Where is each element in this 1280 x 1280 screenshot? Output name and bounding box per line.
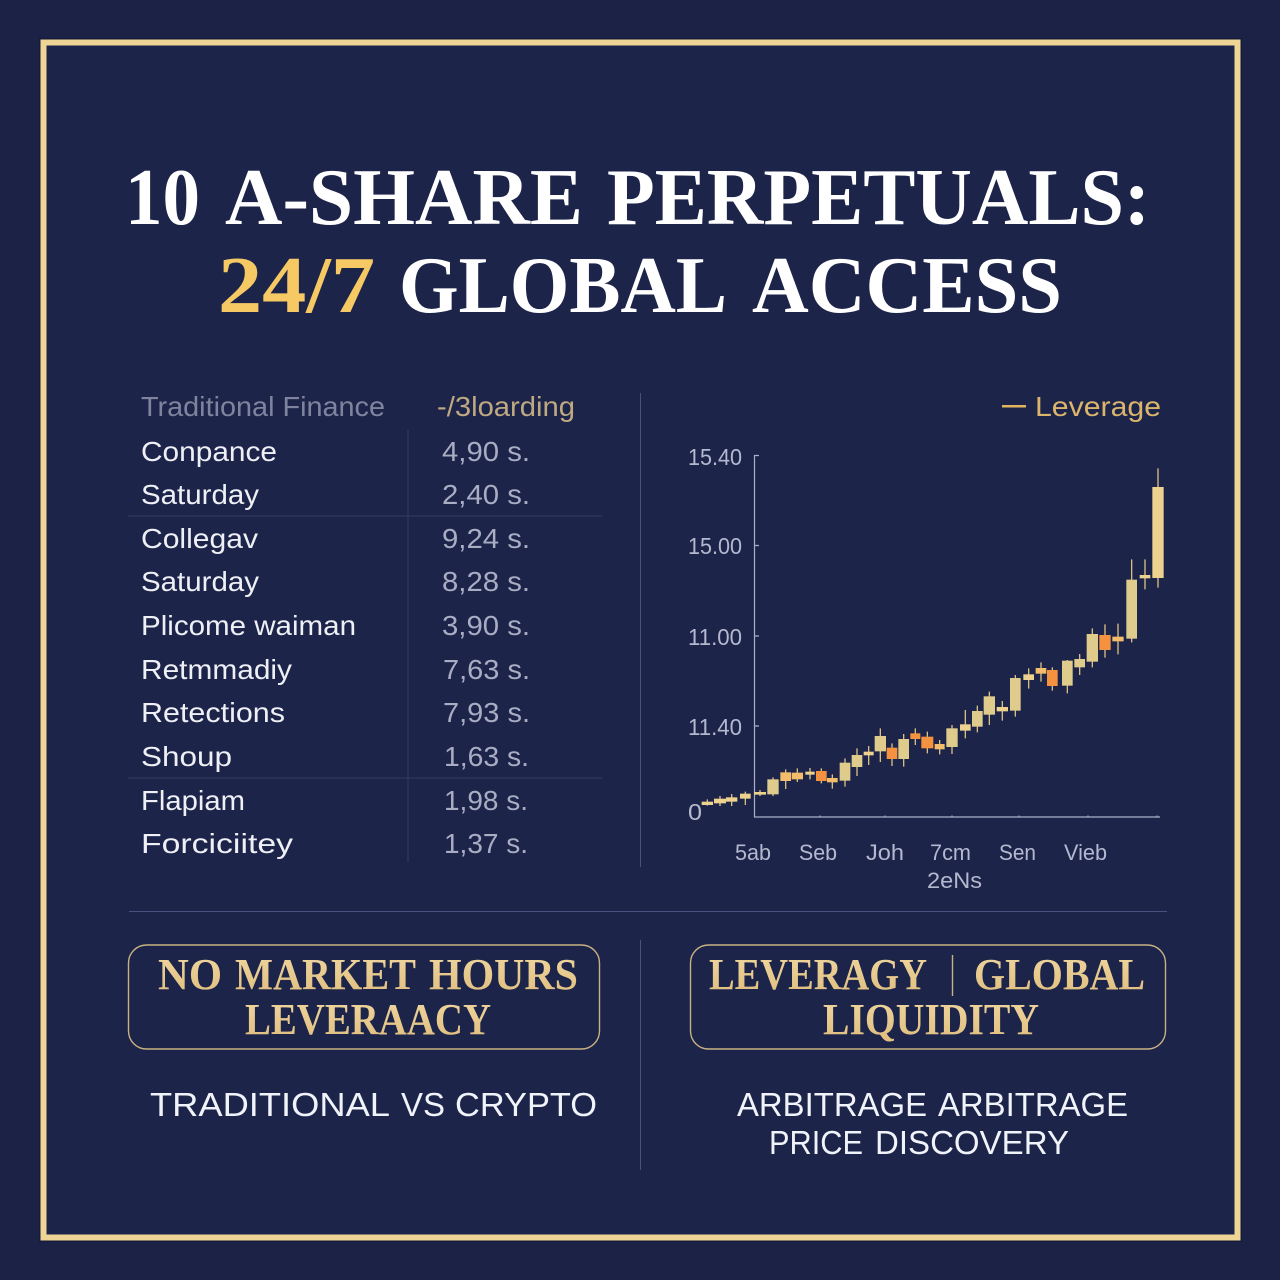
y axis labels: 11.40 (688, 714, 742, 740)
panel: candlestick chart (688, 391, 1164, 893)
table rows: 7,93 s. (443, 697, 530, 728)
caption: arbitrage and price discovery: ARBITRAGE (737, 1086, 927, 1123)
table rows: 1,37 s. (444, 828, 528, 859)
y axis labels: 15.40 (688, 444, 742, 470)
table rows: Retmmadiy (141, 654, 292, 685)
x axis labels: Seb (799, 840, 837, 865)
callout: leverage and global liquidity: GLOBAL (974, 950, 1145, 999)
candles: late segment (921, 468, 1164, 754)
callout: leverage and global liquidity: LEVERAGY (709, 950, 927, 999)
callout: no market hours: HOURS (429, 950, 578, 999)
table rows: 3,90 s. (442, 610, 530, 641)
callout: no market hours (128, 945, 600, 1049)
title (125, 154, 1150, 330)
x axis labels: 2eNs (927, 868, 982, 893)
title: 24/7 (218, 242, 375, 330)
table rows: Shoup (141, 741, 232, 772)
x axis labels (735, 840, 1107, 893)
x axis labels: Vieb (1064, 840, 1107, 865)
y axis labels: 11.00 (688, 624, 742, 650)
title: GLOBAL (399, 242, 727, 330)
table header (141, 391, 575, 422)
title: PERPETUALS: (607, 154, 1150, 242)
legend: Leverage (1035, 391, 1161, 422)
y axis labels: 15.00 (688, 533, 742, 559)
table rows: 1,63 s. (444, 741, 529, 772)
table rows: 1,98 s. (444, 785, 528, 816)
table rows: 7,63 s. (443, 654, 530, 685)
title: ACCESS (752, 242, 1062, 330)
table rows: Conpance (141, 436, 277, 467)
caption: traditional vs crypto: CRYPTO (455, 1086, 597, 1123)
panel: comparison table (128, 391, 602, 862)
callout: leverage and global liquidity: LIQUIDITY (823, 995, 1039, 1044)
table rows: Saturday (141, 566, 259, 597)
table rows: 9,24 s. (442, 523, 530, 554)
x axis labels: 7cm (930, 840, 971, 865)
table rows: Saturday (141, 479, 259, 510)
callout: no market hours: NO (158, 950, 222, 999)
table rows: 4,90 s. (442, 436, 530, 467)
table rows: Plicome waiman (141, 610, 356, 641)
y axis labels (688, 444, 742, 825)
caption: arbitrage and price discovery: ARBITRAGE (938, 1086, 1128, 1123)
callout: no market hours: MARKET (235, 950, 416, 999)
callout: leverage and global liquidity (690, 945, 1166, 1049)
table rows: Flapiam (141, 785, 245, 816)
candles: early segment (702, 728, 920, 806)
y axis labels: 0 (688, 799, 702, 825)
title: 10 (125, 154, 200, 242)
x axis labels: Sen (999, 840, 1036, 865)
table header: Traditional Finance (141, 391, 385, 422)
caption: traditional vs crypto (150, 1086, 597, 1123)
caption: traditional vs crypto: TRADITIONAL (150, 1086, 390, 1123)
callout: no market hours: LEVERAACY (245, 995, 491, 1044)
caption: traditional vs crypto: VS (401, 1086, 445, 1123)
caption: arbitrage and price discovery: DISCOVERY (875, 1124, 1069, 1161)
table rows: Forciciitey (141, 828, 293, 859)
table rows: 2,40 s. (442, 479, 530, 510)
table rows: 8,28 s. (442, 566, 530, 597)
table header: -/3loarding (437, 391, 575, 422)
title: A-SHARE (225, 154, 583, 242)
x axis labels: Joh (866, 840, 904, 865)
caption: arbitrage and price discovery: PRICE (769, 1124, 863, 1161)
caption: arbitrage and price discovery (737, 1086, 1128, 1161)
chart axes (754, 456, 1160, 817)
table rows: Retections (141, 697, 285, 728)
table rows: Collegav (141, 523, 258, 554)
x axis labels: 5ab (735, 840, 771, 865)
table rows (141, 436, 530, 859)
